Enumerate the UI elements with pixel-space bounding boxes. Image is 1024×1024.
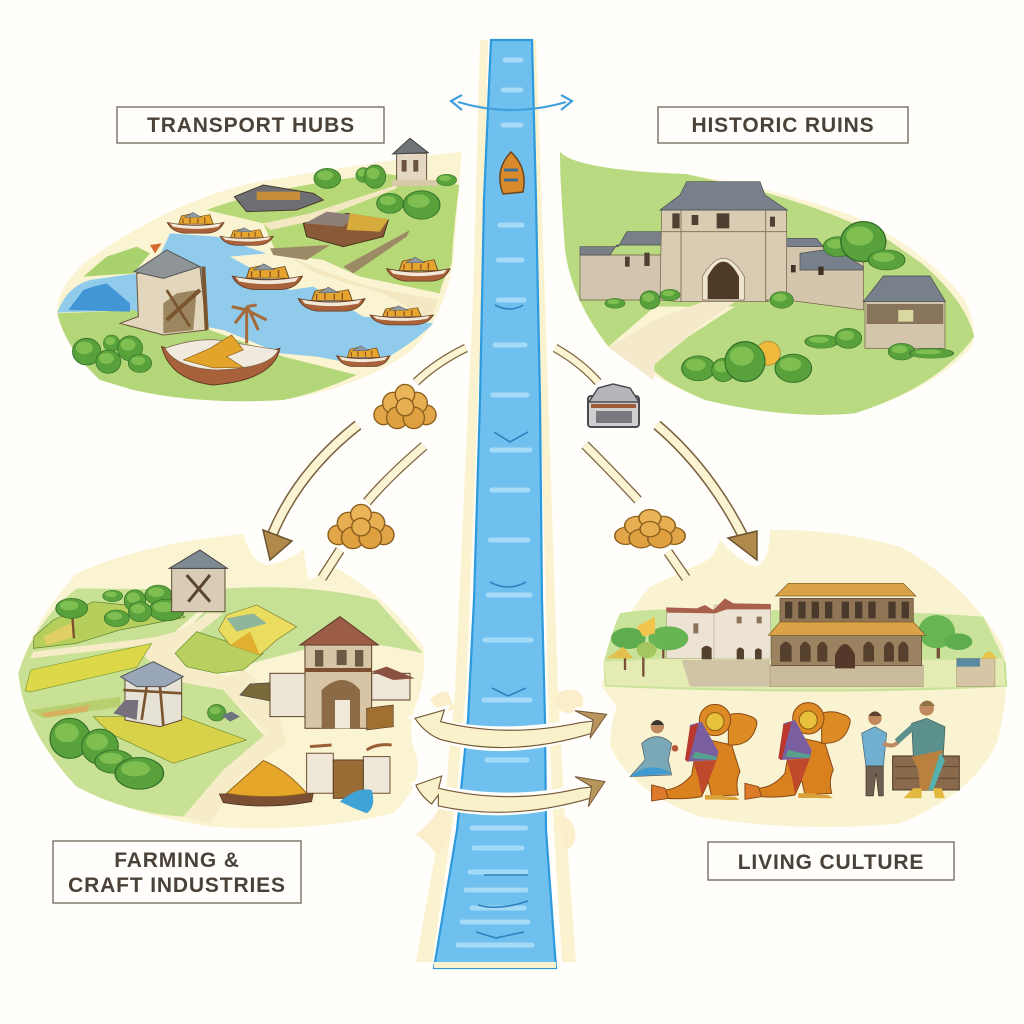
hilltop tower bbox=[392, 138, 438, 186]
label: transport hubs: TRANSPORT HUBS bbox=[147, 114, 355, 137]
water bbox=[434, 40, 556, 968]
hedge bbox=[50, 718, 163, 789]
crop strips bbox=[25, 643, 152, 718]
shed in field bbox=[207, 704, 240, 722]
land outline bbox=[560, 152, 974, 415]
mill bbox=[113, 662, 183, 727]
river bbox=[57, 233, 433, 367]
panel: living culture bbox=[602, 530, 1007, 827]
label: farming and craft industries bbox=[53, 841, 301, 903]
cottage bbox=[863, 276, 946, 348]
warehouse bbox=[120, 243, 207, 335]
icon: small boat on canal bbox=[500, 152, 524, 194]
dock bbox=[270, 230, 410, 273]
bushes left bbox=[72, 335, 152, 373]
pale path bbox=[263, 185, 438, 320]
craft workshop bbox=[240, 617, 415, 730]
label: farming and craft industries: FARMING & bbox=[114, 849, 240, 872]
figure: standing man bbox=[862, 711, 898, 796]
arrow: right outer bbox=[657, 425, 757, 560]
icon: grain pile upper left bbox=[374, 384, 436, 429]
northwest field with trees bbox=[33, 585, 185, 648]
lower green land bbox=[57, 310, 357, 401]
figure: lion dancer right bbox=[745, 703, 850, 799]
cream shore blobs bbox=[415, 690, 584, 853]
barn bbox=[169, 550, 227, 612]
left trees bbox=[607, 617, 688, 677]
big grain boat bbox=[162, 305, 280, 385]
grain heap bbox=[219, 761, 313, 806]
green horizon bbox=[603, 609, 1007, 692]
grass bbox=[560, 152, 974, 415]
arrow: left upper segment bbox=[416, 348, 466, 382]
barge hall bbox=[303, 212, 388, 247]
left meadow bbox=[83, 247, 150, 277]
arrow: left outer bbox=[263, 425, 358, 560]
west green bbox=[18, 588, 265, 817]
main hall bbox=[768, 583, 926, 687]
panel: transport hubs bbox=[57, 138, 462, 401]
right tree bbox=[918, 615, 972, 658]
fortress bbox=[580, 182, 863, 310]
lower field bbox=[93, 717, 247, 763]
land outline bbox=[18, 534, 424, 828]
label: living culture bbox=[708, 842, 954, 880]
figure: lion dancer left bbox=[652, 704, 757, 801]
icon: grain pile lower right bbox=[615, 510, 685, 548]
shrubs bbox=[605, 289, 953, 382]
arrow: right upper segment bbox=[555, 348, 598, 382]
canal banks bbox=[416, 40, 576, 962]
panel: historic ruins bbox=[560, 152, 974, 415]
label: living culture: LIVING CULTURE bbox=[738, 851, 924, 874]
label: farming and craft industries: CRAFT INDUSTRIES bbox=[68, 874, 286, 897]
arrow: left inner bbox=[322, 446, 424, 578]
land outline bbox=[57, 152, 462, 400]
ground sand bbox=[603, 658, 1005, 689]
small gatehouse bbox=[957, 652, 997, 687]
label: transport hubs bbox=[117, 107, 384, 143]
old buildings bbox=[666, 598, 771, 687]
arrow: exchange lower bbox=[416, 776, 605, 812]
arrow: right inner bbox=[585, 445, 686, 578]
gate path bbox=[608, 298, 738, 380]
middle field bbox=[175, 632, 263, 673]
figure: seated craftsman and chest bbox=[893, 700, 959, 798]
icon: stone chest bbox=[588, 384, 639, 427]
loom stall bbox=[307, 745, 392, 813]
arrow: exchange upper bbox=[415, 710, 607, 748]
icon: top bridge arrow bbox=[451, 95, 572, 110]
upper green land bbox=[207, 173, 459, 293]
terraces bbox=[218, 605, 297, 655]
tree behind wall bbox=[823, 222, 905, 270]
pale track bbox=[30, 613, 287, 823]
panel: farming and craft industries bbox=[18, 534, 424, 828]
mountains in lagoon bbox=[68, 283, 130, 312]
label: historic ruins bbox=[658, 107, 908, 143]
moored boats bbox=[167, 185, 450, 367]
bushes top bbox=[314, 165, 457, 219]
figure: seated musician bbox=[630, 720, 678, 777]
east green bbox=[177, 587, 423, 670]
icon: grain pile lower left bbox=[328, 504, 394, 549]
central canal bbox=[415, 40, 584, 968]
land outline bbox=[602, 530, 1006, 827]
label: historic ruins: HISTORIC RUINS bbox=[691, 114, 875, 137]
